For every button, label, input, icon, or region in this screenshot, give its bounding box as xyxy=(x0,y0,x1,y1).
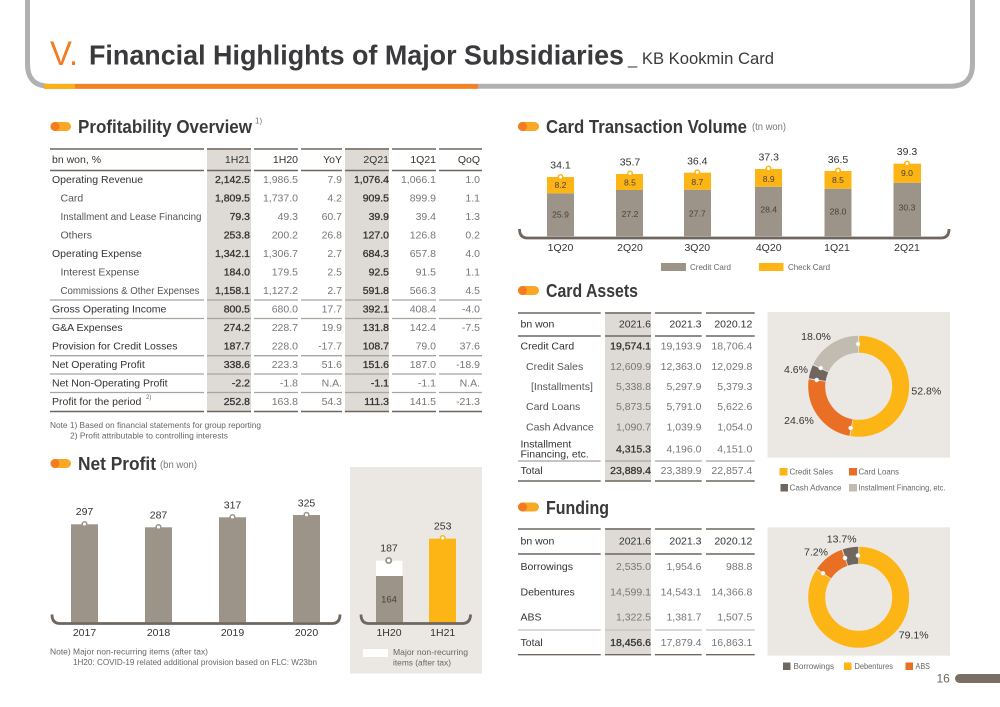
row: Gross Operating Income xyxy=(52,304,480,316)
row: Installment Financing: Installment xyxy=(520,438,571,450)
row: Net Non-Operating Profit: N.A. xyxy=(460,378,480,390)
row: ABS xyxy=(520,612,752,624)
legend: non-recurring items xyxy=(363,647,468,668)
row: Credit Sales: 12,029.8 xyxy=(711,361,752,373)
row: Credit Sales xyxy=(526,361,752,373)
row: Gross Operating Income: 800.5 xyxy=(224,304,250,316)
legend: card assets: Cash Advance xyxy=(790,483,842,493)
row: Installment and Lease Financing: 49.3 xyxy=(278,211,298,223)
donut labels: 7.2% xyxy=(804,546,828,558)
bar 3Q20: 3Q20 xyxy=(684,242,710,254)
row: G&A Expenses: G&A Expenses xyxy=(52,322,123,334)
bar 1H20: 187 xyxy=(380,543,398,555)
table: card assets xyxy=(518,311,755,483)
bar 1Q21 xyxy=(824,154,852,254)
donut labels: 4.6% xyxy=(784,364,808,376)
bar 1H21: 253 xyxy=(434,520,452,532)
row: Commissions & Other Expenses: 566.3 xyxy=(410,285,436,297)
row: ABS: ABS xyxy=(520,612,542,624)
heading: Profitability Overview: 1) xyxy=(255,116,262,126)
row: Total: Total xyxy=(520,637,543,649)
row: Operating Expense: 684.3 xyxy=(363,248,389,260)
bar 3Q20 xyxy=(684,156,711,254)
row: Total: 22,857.4 xyxy=(711,465,752,477)
row: Installment and Lease Financing: 79.3 xyxy=(230,211,250,223)
donut labels: 18.0% xyxy=(801,331,831,343)
bar 4Q20: 8.9 xyxy=(763,174,775,184)
donut labels: 52.8% xyxy=(911,386,941,398)
row: Others xyxy=(60,229,480,241)
title: V. xyxy=(50,35,78,73)
row: Debentures: Debentures xyxy=(520,586,575,598)
row: ABS: 1,507.5 xyxy=(717,612,752,624)
row: Net Non-Operating Profit: -1.8 xyxy=(280,378,298,390)
bar 2Q20: 8.5 xyxy=(624,178,636,188)
row: Commissions & Other Expenses xyxy=(60,285,480,297)
bar 2020: 325 xyxy=(298,497,315,509)
row: Profit for the period: 2) xyxy=(146,395,151,401)
row: Net Operating Profit: 338.6 xyxy=(224,359,250,371)
row: Operating Revenue: 2,142.5 xyxy=(215,174,250,186)
row: Debentures: 14,599.1 xyxy=(610,586,651,598)
bar 4Q20: 4Q20 xyxy=(756,242,782,254)
legend: card transaction volume xyxy=(661,262,830,272)
row: Profit for the period: -21.3 xyxy=(456,396,480,408)
row: Others: 200.2 xyxy=(272,229,298,241)
row: G&A Expenses: -7.5 xyxy=(462,322,480,334)
bar 2019: 317 xyxy=(224,500,241,512)
table notes: Note 1) Based on financial statements for group reporting xyxy=(50,420,261,430)
row: Provision for Credit Losses: 108.7 xyxy=(363,341,389,353)
bar 2Q21: 39.3 xyxy=(897,146,917,158)
stacked bar chart: card transaction volume xyxy=(520,146,949,254)
bar 2020: 2020 xyxy=(295,627,318,639)
heading: Card Assets: Card Assets xyxy=(546,281,638,301)
row: Provision for Credit Losses: Provision for Credit Losses xyxy=(52,341,177,353)
row: Card Loans: Card Loans xyxy=(526,401,580,413)
row: Card Loans: 5,873.5 xyxy=(616,401,651,413)
legend: card assets: Card Loans xyxy=(858,466,899,476)
header frame xyxy=(28,0,972,89)
bar 1Q21: 8.5 xyxy=(832,175,844,185)
row: Gross Operating Income: 17.7 xyxy=(322,304,342,316)
page number xyxy=(936,672,1000,686)
row: Cash Advance xyxy=(526,421,752,433)
bar 2Q21 xyxy=(894,146,921,254)
row: Net Non-Operating Profit: -1.1 xyxy=(371,378,389,390)
row: Installments: [Installments] xyxy=(531,381,593,393)
row: Cash Advance: 1,039.9 xyxy=(666,421,702,433)
bar 1Q20: 8.2 xyxy=(555,180,567,190)
panel: card assets donut xyxy=(768,312,950,458)
row: Card: 1,809.5 xyxy=(215,192,250,204)
row: Installment Financing: 4,151.0 xyxy=(717,443,752,455)
row: Others: 253.8 xyxy=(224,229,250,241)
row: Operating Revenue: 7.9 xyxy=(327,174,342,186)
row: Others: 126.8 xyxy=(410,229,436,241)
bar 4Q20 xyxy=(755,151,782,254)
donut labels: 13.7% xyxy=(827,534,857,546)
bar 2018: 2018 xyxy=(147,627,170,639)
bar 4Q20: 28.4 xyxy=(760,204,777,214)
row: Net Non-Operating Profit: -1.1 xyxy=(418,378,436,390)
row: Credit Card: 19,193.9 xyxy=(661,341,702,353)
heading: Net Profit: Net Profit xyxy=(78,454,156,474)
donut markers xyxy=(821,554,860,575)
header row: 2021.6 xyxy=(619,318,651,330)
net profit note: Note) Major non-recurring items (after tax) xyxy=(50,646,208,656)
table header row: 1H21 xyxy=(225,154,250,166)
bar 1H20: 1H20 xyxy=(376,627,402,639)
net profit note: 1H20: COVID-19 related additional provision based on FLC: W23bn xyxy=(73,657,317,667)
heading: Funding xyxy=(518,498,609,518)
bar 1Q20: 1Q20 xyxy=(548,242,574,254)
row: Card: 899.9 xyxy=(410,192,436,204)
row: Commissions & Other Expenses: 591.8 xyxy=(363,285,389,297)
heading: Net Profit: (bn won) xyxy=(160,460,197,471)
row: Borrowings: 2,535.0 xyxy=(616,561,651,573)
row: G&A Expenses: 142.4 xyxy=(410,322,436,334)
row: Credit Sales: 12,363.0 xyxy=(661,361,702,373)
row: G&A Expenses: 19.9 xyxy=(322,322,342,334)
row: Net Operating Profit: 51.6 xyxy=(322,359,342,371)
row: Operating Expense: 4.0 xyxy=(465,248,480,260)
row: Total: 17,879.4 xyxy=(661,637,702,649)
legend: card transaction volume: Check Card xyxy=(788,262,830,272)
row: Card Loans xyxy=(526,401,752,413)
row: Operating Expense: 1,342.1 xyxy=(215,248,250,260)
bar 2018 xyxy=(145,510,172,639)
legend: funding xyxy=(783,661,930,671)
row: Profit for the period: Profit for the period xyxy=(52,396,141,408)
heading: Profitability Overview: Profitability Overview xyxy=(78,117,253,137)
legend: funding: ABS xyxy=(916,661,930,671)
bar 2Q20: 35.7 xyxy=(620,156,640,168)
row: Total: Total xyxy=(520,465,543,477)
row: Total: 18,456.6 xyxy=(610,637,651,649)
bar 2Q21: 30.3 xyxy=(899,202,916,212)
row: ABS: 1,322.5 xyxy=(616,612,651,624)
row: Interest Expense: 2.5 xyxy=(327,266,342,278)
bar 2Q20 xyxy=(616,156,643,254)
row: Commissions & Other Expenses: 1,158.1 xyxy=(215,285,250,297)
row: Provision for Credit Losses xyxy=(52,341,480,353)
row: G&A Expenses: 131.8 xyxy=(363,322,389,334)
table header row: QoQ xyxy=(458,154,480,166)
heading: Net Profit xyxy=(50,454,197,474)
header row: 2021.6 xyxy=(619,536,651,548)
row: Commissions & Other Expenses: 4.5 xyxy=(465,285,480,297)
header row: 2021.3 xyxy=(669,318,702,330)
legend: card assets xyxy=(780,466,946,493)
bar 1H21 xyxy=(429,520,456,639)
row: Gross Operating Income: -4.0 xyxy=(462,304,480,316)
row: Profit for the period: 163.8 xyxy=(272,396,298,408)
title: _ KB Kookmin Card xyxy=(627,49,774,68)
table header row: 1Q21 xyxy=(410,154,436,166)
header row xyxy=(520,536,752,548)
row: Credit Sales: 12,609.9 xyxy=(610,361,651,373)
row: Profit for the period: 252.8 xyxy=(224,396,250,408)
row: Profit for the period: 141.5 xyxy=(410,396,436,408)
row: Installment and Lease Financing: 39.9 xyxy=(369,211,389,223)
row: Operating Expense: 657.8 xyxy=(410,248,436,260)
table notes: 2) Profit attributable to controlling interests xyxy=(70,430,228,440)
row: Card xyxy=(60,192,480,204)
row: Net Non-Operating Profit: Net Non-Operating Profit xyxy=(52,378,168,390)
row: Operating Revenue: 1.0 xyxy=(465,174,480,186)
row: Operating Revenue: 1,066.1 xyxy=(401,174,436,186)
row: Interest Expense: 91.5 xyxy=(416,266,436,278)
bar 1Q21: 36.5 xyxy=(828,154,848,166)
header row xyxy=(520,318,752,330)
title xyxy=(50,35,774,73)
bar 1Q21: 1Q21 xyxy=(824,242,850,254)
donut chart: funding xyxy=(817,555,901,639)
heading: Card Transaction Volume: (tn won) xyxy=(752,122,786,133)
row: Total xyxy=(520,465,752,477)
row: Others: 127.0 xyxy=(363,229,389,241)
bar 1Q20 xyxy=(547,160,574,254)
panel: half-year net profit xyxy=(350,467,482,674)
table header row: bn won, % xyxy=(52,154,101,166)
row: Installment Financing xyxy=(520,438,752,460)
row: Others: 26.8 xyxy=(322,229,342,241)
row: Provision for Credit Losses: 187.7 xyxy=(224,341,250,353)
row: Credit Sales: Credit Sales xyxy=(526,361,583,373)
row: Card Loans: 5,622.6 xyxy=(717,401,752,413)
bar 2017: 297 xyxy=(76,506,93,518)
row: Commissions & Other Expenses: 2.7 xyxy=(327,285,342,297)
row: Gross Operating Income: 680.0 xyxy=(272,304,298,316)
bar 2017 xyxy=(71,506,98,639)
bar 1Q21: 28.0 xyxy=(830,206,847,216)
heading: Card Assets xyxy=(518,281,638,301)
row: Provision for Credit Losses: 228.0 xyxy=(272,341,298,353)
panel: funding donut xyxy=(768,527,950,656)
header row: bn won xyxy=(520,536,555,548)
bar 2019 xyxy=(219,500,246,639)
row: Installment and Lease Financing: Installment and Lease Financing xyxy=(60,211,202,223)
row: Profit for the period xyxy=(52,395,480,408)
donut labels: 79.1% xyxy=(899,629,929,641)
row: Installment and Lease Financing: 39.4 xyxy=(416,211,436,223)
table header row xyxy=(52,154,480,166)
bar 1Q20: 34.1 xyxy=(550,160,571,172)
row: Cash Advance: 1,054.0 xyxy=(717,421,752,433)
table header row: 2Q21 xyxy=(363,154,389,166)
row: Gross Operating Income: 408.4 xyxy=(410,304,436,316)
header row: 2021.3 xyxy=(669,536,702,548)
row: Provision for Credit Losses: 37.6 xyxy=(460,341,480,353)
row: Card: Card xyxy=(60,192,83,204)
row: Operating Expense xyxy=(52,248,480,260)
legend: non-recurring items: Major non-recurring xyxy=(393,647,468,657)
row: Interest Expense: 179.5 xyxy=(272,266,298,278)
table: profitability overview xyxy=(50,147,482,413)
bar chart: annual net profit xyxy=(52,497,340,639)
row: Installments: 5,297.9 xyxy=(666,381,702,393)
legend: card transaction volume: Credit Card xyxy=(690,262,731,272)
row: Credit Card xyxy=(520,341,752,353)
row: Card: 1,737.0 xyxy=(263,192,298,204)
row: Debentures xyxy=(520,586,752,598)
row: Operating Revenue: Operating Revenue xyxy=(52,174,143,186)
row: Borrowings: Borrowings xyxy=(520,561,573,573)
legend: funding: Borrowings xyxy=(794,661,834,671)
bar 2019: 2019 xyxy=(221,627,244,639)
row: Installment and Lease Financing: 60.7 xyxy=(322,211,342,223)
row: Net Operating Profit: 223.3 xyxy=(272,359,298,371)
row: Net Operating Profit: 187.0 xyxy=(410,359,436,371)
row: Installment Financing: 4,196.0 xyxy=(666,443,702,455)
row: Credit Card: 18,706.4 xyxy=(711,341,752,353)
row: Others: Others xyxy=(60,229,92,241)
bar 3Q20: 36.4 xyxy=(687,156,708,168)
row: Net Operating Profit: Net Operating Profit xyxy=(52,359,145,371)
row: Debentures: 14,366.8 xyxy=(711,586,752,598)
row: Gross Operating Income: Gross Operating Income xyxy=(52,304,167,316)
row: Commissions & Other Expenses: 1,127.2 xyxy=(263,285,298,297)
bar 2Q21: 9.0 xyxy=(901,168,913,178)
row: Borrowings: 1,954.6 xyxy=(666,561,702,573)
row: Total: 23,389.9 xyxy=(661,465,702,477)
bar 2Q20: 2Q20 xyxy=(617,242,643,254)
row: Interest Expense xyxy=(60,266,480,278)
row: Total xyxy=(520,637,752,649)
row: Installments: 5,338.8 xyxy=(616,381,651,393)
bar 3Q20: 27.7 xyxy=(689,208,706,218)
header row: 2020.12 xyxy=(714,318,752,330)
bar 3Q20: 8.7 xyxy=(691,177,703,187)
row: Card: 1.1 xyxy=(465,192,480,204)
row: Operating Revenue xyxy=(52,174,480,186)
legend: funding: Debentures xyxy=(854,661,893,671)
row: Card: 909.5 xyxy=(363,192,389,204)
bar 1H20: 164 xyxy=(381,594,397,606)
table header row: YoY xyxy=(323,154,342,166)
row: Operating Expense: 2.7 xyxy=(327,248,342,260)
row: Profit for the period: 54.3 xyxy=(322,396,342,408)
donut labels xyxy=(804,534,929,641)
table: funding xyxy=(518,527,755,657)
row: Net Non-Operating Profit: -2.2 xyxy=(232,378,250,390)
row: Profit for the period: 111.3 xyxy=(364,396,389,408)
row: Commissions & Other Expenses: Commissions & Other Expenses xyxy=(60,285,200,297)
row: Installments xyxy=(531,381,752,393)
row: Cash Advance: 1,090.7 xyxy=(616,421,651,433)
row: G&A Expenses: 274.2 xyxy=(224,322,250,334)
row: Card Loans: 5,791.0 xyxy=(666,401,702,413)
row: Installment and Lease Financing xyxy=(60,211,480,223)
heading: Card Transaction Volume: Card Transaction Volume xyxy=(546,117,747,137)
row: Operating Revenue: 1,986.5 xyxy=(263,174,298,186)
donut markers xyxy=(815,342,860,430)
title: Financial Highlights of Major Subsidiaries xyxy=(89,40,624,70)
row: Borrowings xyxy=(520,561,752,573)
table notes xyxy=(50,420,261,440)
table header row: 1H20 xyxy=(273,154,298,166)
row: Provision for Credit Losses: 79.0 xyxy=(416,341,436,353)
bar 4Q20: 37.3 xyxy=(758,151,779,163)
legend: non-recurring items: items (after tax) xyxy=(393,658,451,668)
bar 2Q21: 2Q21 xyxy=(894,242,920,254)
row: Cash Advance: Cash Advance xyxy=(526,421,594,433)
bar 1H21: 1H21 xyxy=(430,627,455,639)
bar 1Q20: 25.9 xyxy=(552,210,569,220)
donut labels: 24.6% xyxy=(784,415,814,427)
row: ABS: 1,381.7 xyxy=(666,612,702,624)
bar 2Q20: 27.2 xyxy=(622,209,639,219)
header row: bn won xyxy=(520,318,555,330)
row: G&A Expenses xyxy=(52,322,480,334)
row: Installment Financing: 4,315.3 xyxy=(616,443,651,455)
row: Net Operating Profit xyxy=(52,359,480,371)
row: Installment Financing: Financing, etc. xyxy=(520,448,589,460)
page number: 16 xyxy=(936,672,950,686)
row: Interest Expense: 1.1 xyxy=(465,266,480,278)
row: Total: 16,863.1 xyxy=(711,637,752,649)
row: Operating Revenue: 1,076.4 xyxy=(354,174,389,186)
donut labels xyxy=(784,331,941,427)
row: Card: 4.2 xyxy=(327,192,342,204)
row: Operating Expense: 1,306.7 xyxy=(263,248,298,260)
row: Interest Expense: 92.5 xyxy=(369,266,389,278)
row: Credit Card: Credit Card xyxy=(520,341,574,353)
bar 2020 xyxy=(293,497,320,639)
bar 2017: 2017 xyxy=(73,627,96,639)
row: Others: 0.2 xyxy=(465,229,480,241)
row: Net Operating Profit: 151.6 xyxy=(363,359,389,371)
row: Operating Expense: Operating Expense xyxy=(52,248,142,260)
donut chart: card assets xyxy=(817,344,901,428)
row: Credit Card: 19,574.1 xyxy=(610,341,651,353)
row: Debentures: 14,543.1 xyxy=(661,586,702,598)
heading: Funding: Funding xyxy=(546,498,609,518)
row: Total: 23,889.4 xyxy=(610,465,651,477)
legend: card assets: Installment Financing, etc. xyxy=(858,483,946,493)
row: Net Non-Operating Profit xyxy=(52,378,480,390)
bar 2018: 287 xyxy=(150,510,167,522)
row: Installment and Lease Financing: 1.3 xyxy=(465,211,480,223)
row: Interest Expense: 184.0 xyxy=(224,266,250,278)
legend: card assets: Credit Sales xyxy=(790,466,833,476)
header row: 2020.12 xyxy=(714,536,752,548)
row: Installments: 5,379.3 xyxy=(717,381,752,393)
row: G&A Expenses: 228.7 xyxy=(272,322,298,334)
bar 1H20 xyxy=(376,543,403,639)
net profit note xyxy=(50,646,317,667)
row: Interest Expense: Interest Expense xyxy=(60,266,139,278)
row: Gross Operating Income: 392.1 xyxy=(363,304,389,316)
row: Borrowings: 988.8 xyxy=(726,561,752,573)
row: Net Non-Operating Profit: N.A. xyxy=(322,378,342,390)
row: Net Operating Profit: -18.9 xyxy=(456,359,480,371)
row: Provision for Credit Losses: -17.7 xyxy=(318,341,342,353)
